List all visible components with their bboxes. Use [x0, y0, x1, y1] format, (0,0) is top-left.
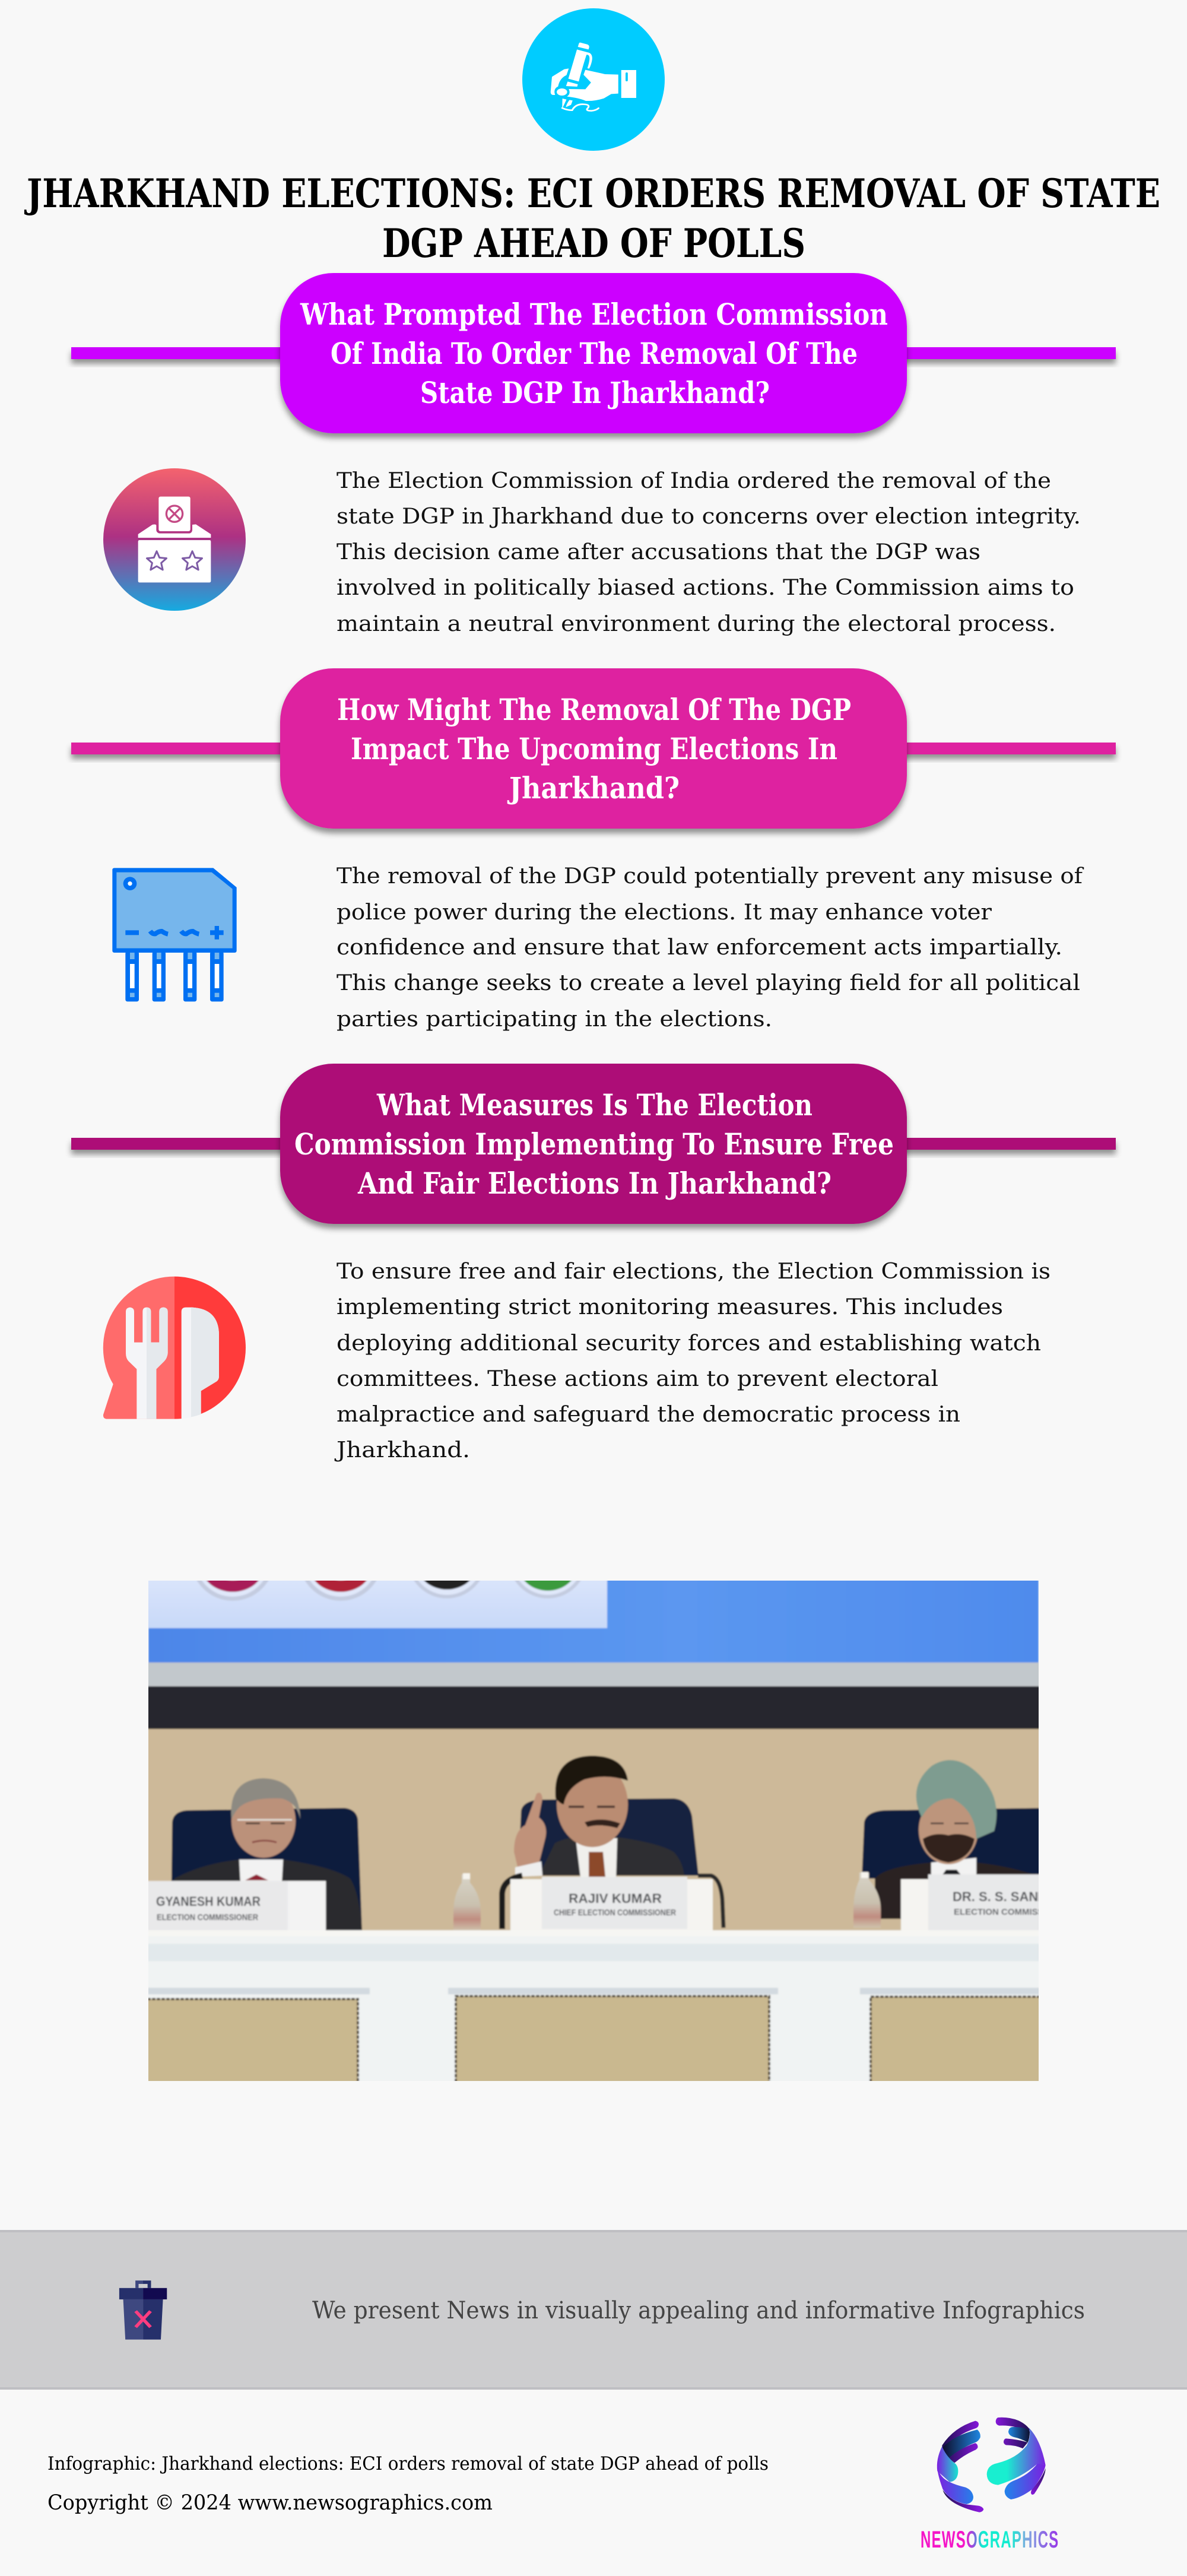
section heading 1: What Prompted The Election Commission	[300, 297, 888, 332]
person: left commissioner	[171, 1778, 362, 1931]
name plate: Gyanesh Kumar: GYANESH KUMAR	[156, 1894, 261, 1909]
name plate: Dr. S. S. Sandhu	[900, 1873, 1039, 1931]
title	[24, 170, 1160, 267]
person: chief election commissioner	[514, 1756, 699, 1877]
body text 1: The Election Commission of India ordered the removal of the	[337, 469, 1051, 493]
body text 3: committees. These actions aim to prevent electoral	[337, 1367, 938, 1391]
name plate: Rajiv Kumar	[510, 1877, 713, 1930]
photo: election commissioners at press conference	[148, 1581, 1039, 2081]
footer credit text: Copyright © 2024 www.newsographics.com	[47, 2491, 493, 2515]
section heading 2: Jharkhand?	[507, 770, 680, 805]
body text 2	[337, 864, 1084, 1032]
name plate: Dr. S. S. Sandhu: DR. S. S. SANDHU	[953, 1889, 1067, 1904]
icon: fork and knife speech bubble	[103, 1277, 246, 1419]
body text 3: malpractice and safeguard the democratic process in	[337, 1403, 960, 1427]
body text 1: state DGP in Jharkhand due to concerns over election integrity.	[337, 505, 1081, 529]
body text 3: To ensure free and fair elections, the Election Commission is	[337, 1260, 1050, 1284]
section heading 1: State DGP In Jharkhand?	[420, 375, 770, 410]
title: DGP AHEAD OF POLLS	[382, 220, 805, 267]
section heading 3: What Measures Is The Election	[376, 1087, 813, 1122]
name plate: Rajiv Kumar: RAJIV KUMAR	[569, 1891, 662, 1906]
section heading 1: Of India To Order The Removal Of The	[331, 336, 858, 371]
tagline band: We present News in visually appealing and informative Infographics	[312, 2297, 1085, 2324]
body text 3	[334, 1260, 1050, 1463]
person: right commissioner	[862, 1760, 1045, 1919]
section heading 3: Commission Implementing To Ensure Free	[294, 1127, 894, 1162]
body text 2: police power during the elections. It may enhance voter	[337, 900, 992, 925]
name plate: Dr. S. S. Sandhu: ELECTION COMMISSIONER	[954, 1907, 1072, 1917]
section heading 2: Impact The Upcoming Elections In	[351, 731, 837, 766]
water bottles and microphones	[453, 1872, 881, 1931]
body text 1: maintain a neutral environment during the electoral process.	[337, 612, 1056, 636]
icon: trash bin	[119, 2280, 167, 2340]
body text 2: confidence and ensure that law enforcement acts impartially.	[337, 935, 1062, 960]
body text 2: The removal of the DGP could potentially prevent any misuse of	[337, 864, 1084, 889]
footer credit text: Infographic: Jharkhand elections: ECI orders removal of state DGP ahead of polls	[47, 2453, 769, 2475]
dais table	[142, 1930, 1045, 2087]
footer credit text	[47, 2453, 769, 2515]
body text 1: involved in politically biased actions. The Commission aims to	[337, 576, 1074, 600]
section heading 1	[71, 273, 1116, 433]
section heading 3	[71, 1064, 1116, 1224]
section heading 2: How Might The Removal Of The DGP	[337, 692, 851, 727]
body text 3: Jharkhand.	[334, 1438, 470, 1463]
body text 2: This change seeks to create a level playing field for all political	[337, 971, 1080, 995]
logo: Newsographics: NEWSOGRAPHICS	[921, 2526, 1061, 2552]
body text 3: implementing strict monitoring measures. This includes	[337, 1295, 1003, 1319]
body text 3: deploying additional security forces and establishing watch	[337, 1331, 1041, 1356]
name plate: Rajiv Kumar: CHIEF ELECTION COMMISSIONER	[554, 1908, 676, 1918]
body text 1: This decision came after accusations that the DGP was	[337, 540, 980, 564]
icon: bridge rectifier chip	[112, 868, 237, 1001]
name plate: Gyanesh Kumar	[142, 1881, 326, 1932]
logo: Newsographics	[921, 2418, 1061, 2552]
section heading 2	[71, 668, 1116, 829]
icon: hand signing with pen	[522, 8, 665, 151]
body text 2: parties participating in the elections.	[337, 1007, 772, 1032]
name plate: Gyanesh Kumar: ELECTION COMMISSIONER	[157, 1912, 258, 1923]
icon: ballot box	[103, 468, 246, 611]
body text 1	[337, 469, 1081, 636]
tagline band	[0, 2230, 1187, 2390]
section heading 3: And Fair Elections In Jharkhand?	[357, 1166, 831, 1201]
